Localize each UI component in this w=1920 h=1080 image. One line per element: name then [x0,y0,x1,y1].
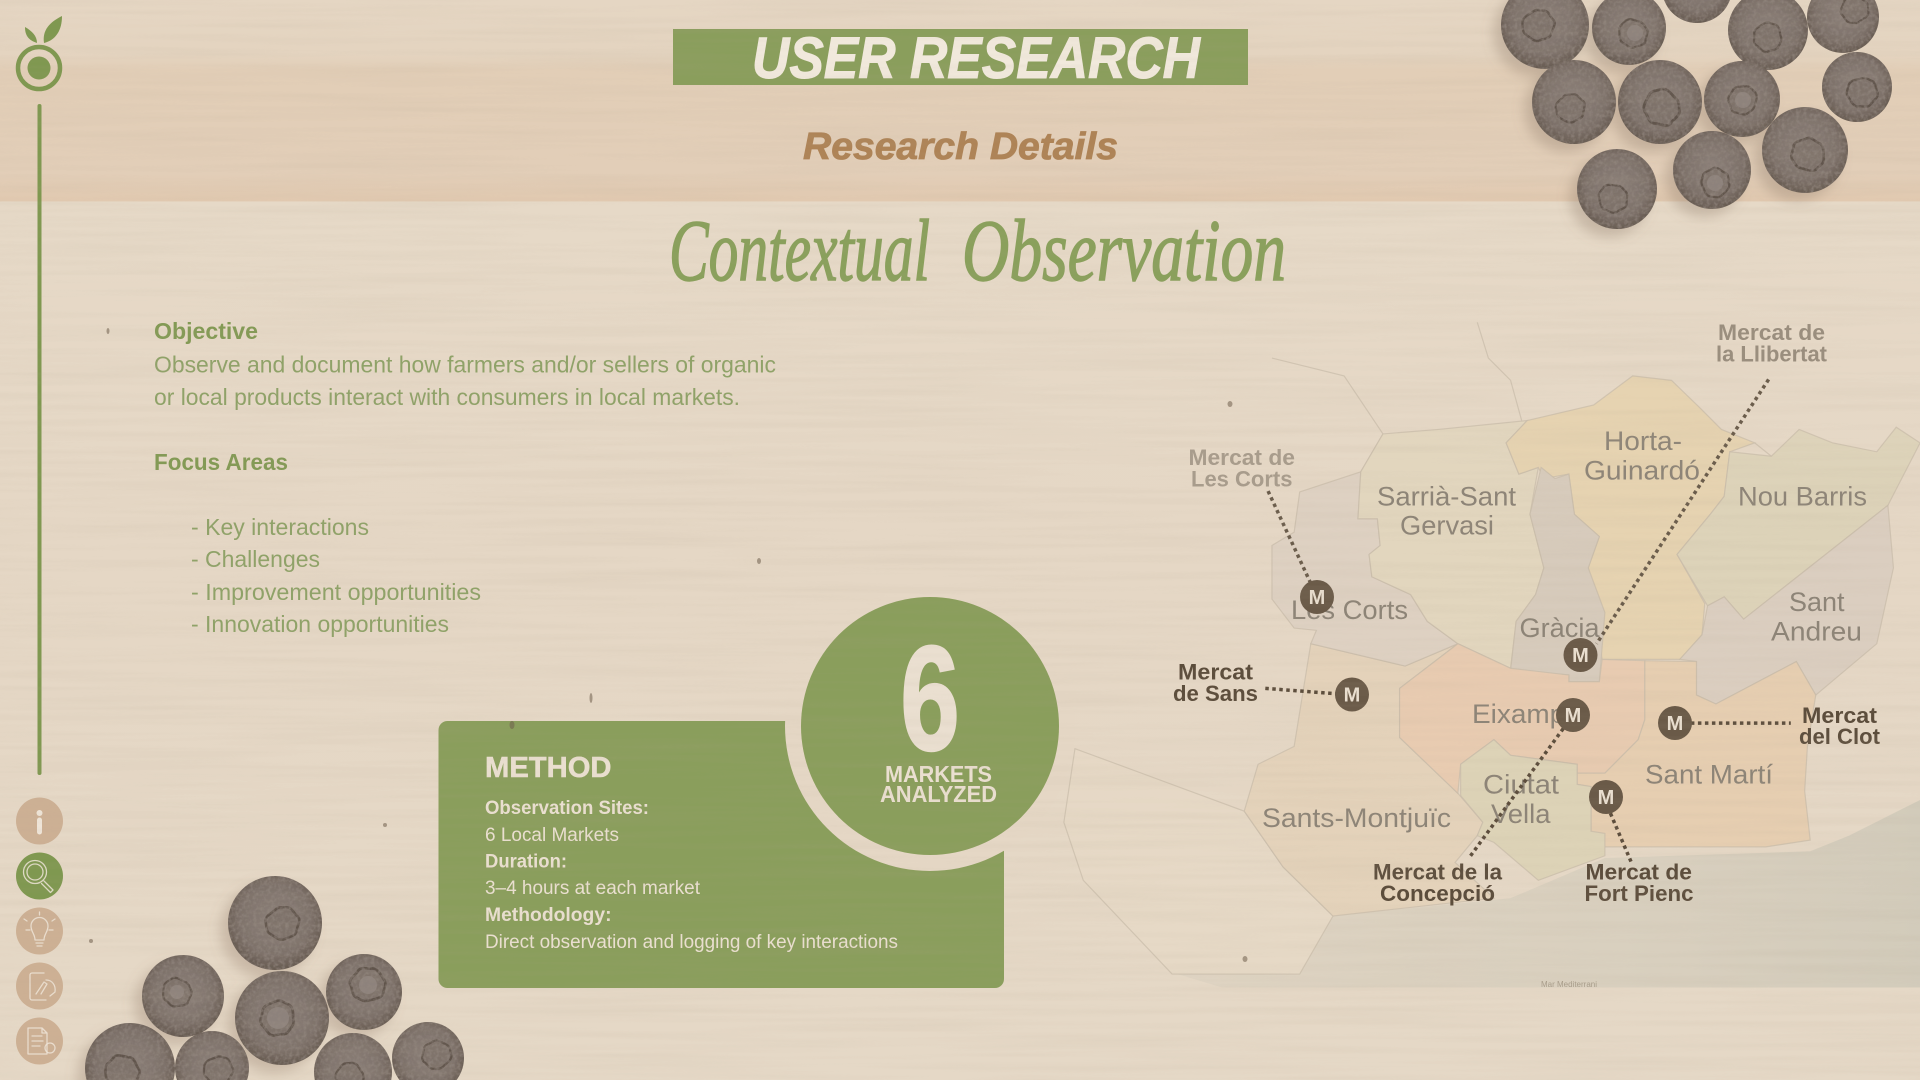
text block: objective [154,318,776,410]
text block: focus areas: - Challenges [191,546,320,572]
panel: method: Duration: [485,852,567,872]
map of Barcelona districts [1064,322,1920,987]
market markers: M [1565,705,1581,727]
district: Sant Marti [1577,661,1816,847]
district: Sant Andreu [1680,505,1893,704]
market markers [1300,580,1692,814]
dotted leader lines [1265,379,1791,862]
market name labels: Concepció [1380,881,1495,906]
text block: focus areas: - Improvement opportunities [191,579,481,605]
market name labels: del Clot [1799,724,1881,749]
text block: focus areas: Focus Areas [154,449,288,475]
callout: 6 markets analyzed: 6 [900,614,960,782]
map district labels: Sants-Montjuïc [1262,803,1451,833]
map district labels: Ciutat [1483,770,1560,800]
sidebar vertical line [38,104,42,775]
text block: objective: Objective [154,318,258,344]
panel: method: Observation Sites: [485,798,649,819]
icon: magnifier, active [16,852,63,900]
sea [1300,800,1920,988]
cardboard specks [89,328,1248,962]
script heading [669,203,1286,300]
market name labels: Mercat de [1586,860,1692,884]
market name labels: Fort Pienc [1584,881,1694,906]
market name labels: Mercat [1802,703,1878,728]
icon: document with check [16,1018,63,1064]
district: Sants-Montjuic [1244,644,1494,916]
market markers: M [1309,587,1325,609]
panel: method: 6 Local Markets [485,825,619,846]
text block: focus areas: - Innovation opportunities [191,611,449,637]
panel: method: METHOD [485,752,612,784]
text block: focus areas [154,449,481,637]
callout: 6 markets analyzed [801,597,1059,855]
icon: info [16,798,63,844]
map district labels: Les Corts [1291,595,1408,625]
map district labels: Sarrià-Sant [1377,482,1517,512]
panel: method [438,581,1075,988]
district: Gracia [1511,467,1605,682]
blueberries: top right [1493,0,1892,237]
title banner: USER RESEARCH [752,26,1201,91]
subtitle: Research Details [803,126,1118,168]
market markers: M [1598,787,1614,809]
map district labels: Sant Martí [1645,760,1774,790]
market markers: M [1667,713,1683,735]
panel: method: 3–4 hours at each market [485,878,701,899]
logo: leaf and recycling ring [18,16,62,89]
panel: method: Direct observation and logging of key interactions [485,932,898,953]
map district labels: Nou Barris [1738,482,1867,512]
market name labels [1173,320,1881,906]
map district labels: Eixample [1472,699,1587,729]
market markers: M [1572,645,1589,667]
district: Eixample [1400,644,1645,793]
map district labels: Andreu [1771,616,1862,646]
text block: focus areas: - Key interactions [191,514,369,540]
district: Les Corts [1272,472,1458,666]
market name labels: Les Corts [1191,466,1292,492]
market name labels: Mercat de la [1373,860,1503,884]
market name labels: la Llibertat [1716,342,1828,366]
map district labels [1262,426,1867,989]
script heading: Observation [962,203,1286,300]
district: Sants-Montjuic west [1064,749,1333,974]
market markers: M [1344,684,1360,706]
district: Nou Barris [1677,427,1920,619]
district: Ciutat Vella [1461,740,1605,880]
text block: objective: Observe and document how farmers and/or sellers of organic [154,352,776,378]
icon: light bulb [16,908,63,954]
callout: 6 markets analyzed: MARKETS [885,761,992,787]
market name labels: Mercat [1178,660,1254,684]
map district labels: Vella [1491,799,1551,829]
icon: hand writing on tablet [16,962,63,1010]
map district labels: Gràcia [1520,613,1600,643]
panel: method: Methodology: [485,905,612,926]
district: Sarria-Sant Gervasi [1384,420,1544,668]
district: Horta-Guinardo [1506,376,1755,659]
script heading: Contextual [669,203,930,300]
map district labels: Horta- [1604,426,1682,456]
market name labels: de Sans [1173,681,1258,706]
blueberries: bottom left [77,876,464,1080]
market name labels: Mercat de [1188,445,1295,470]
market name labels: Mercat de [1718,320,1825,345]
map district labels: Sant [1789,587,1845,617]
outer metropolitan outline [1272,322,1771,472]
map district labels: Gervasi [1400,510,1494,540]
map district labels: Guinardó [1584,456,1700,486]
callout: 6 markets analyzed: ANALYZED [880,781,997,807]
map district labels: Mar Mediterrani [1541,980,1597,989]
text block: objective: or local products interact with consumers in local markets. [154,384,740,410]
